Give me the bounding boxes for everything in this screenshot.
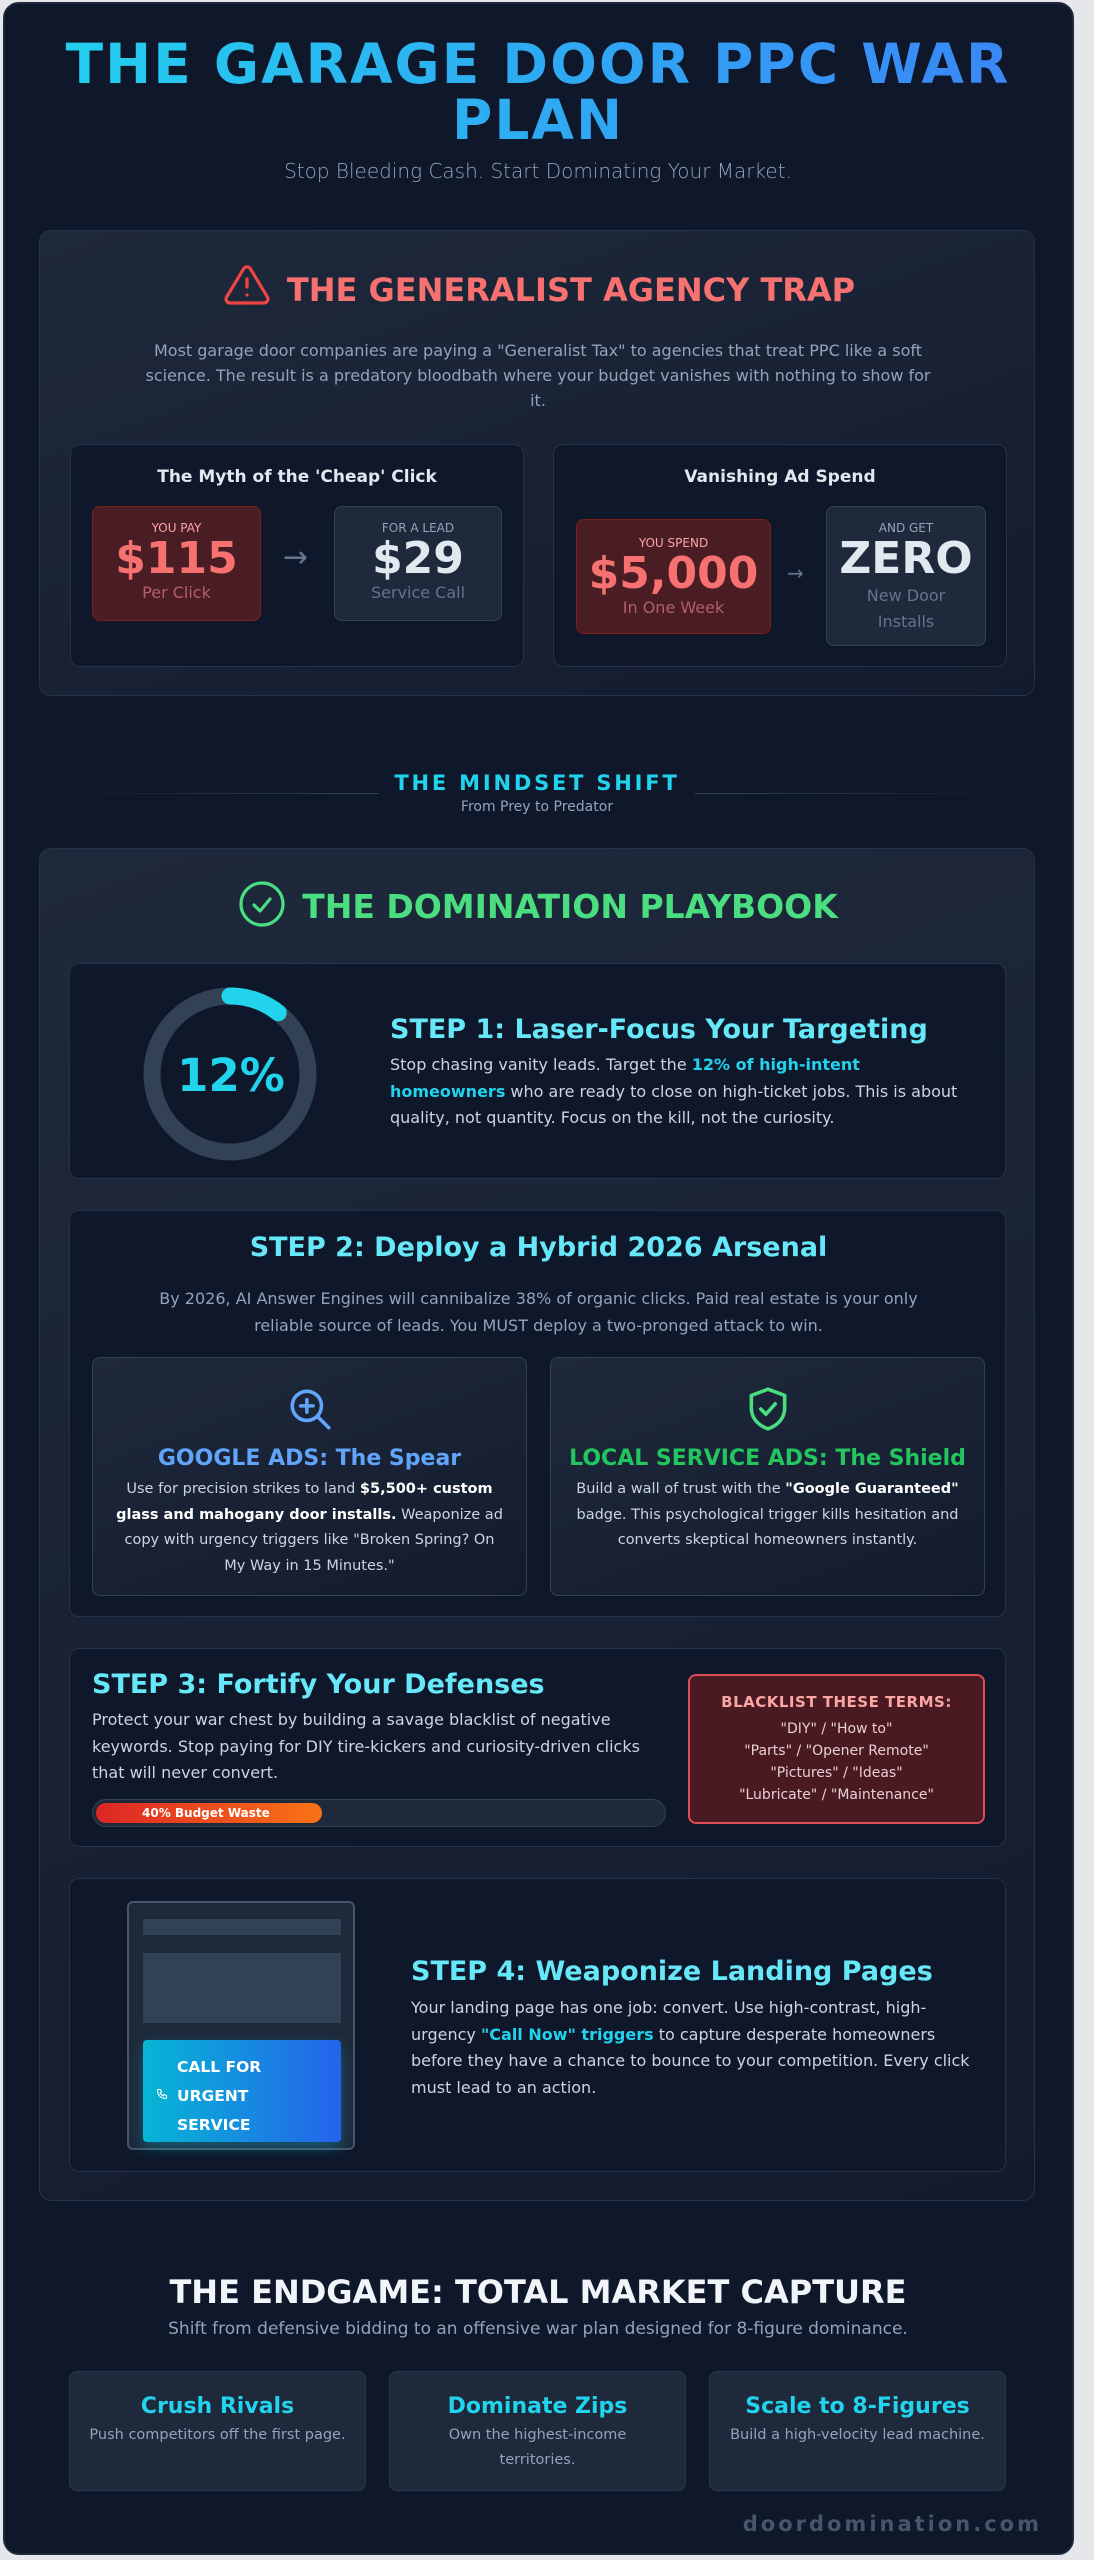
card: local service ads — [550, 1357, 985, 1596]
arrow: → — [787, 561, 804, 585]
card: crush rivals: Push competitors off the first page. — [89, 2427, 346, 2443]
stat: zero: Installs — [878, 612, 934, 631]
subheading: The Myth of the 'Cheap' Click — [157, 467, 437, 487]
cta button — [143, 2040, 341, 2142]
stat: $5,000: YOU SPEND — [639, 536, 708, 550]
heading: mindset shift: THE MINDSET SHIFT — [394, 771, 680, 795]
stat: $5,000: In One Week — [623, 598, 724, 617]
subheading: From Prey to Predator — [461, 799, 613, 815]
heading: playbook: THE DOMINATION PLAYBOOK — [302, 887, 838, 926]
subtitle: google ads: GOOGLE ADS: The Spear — [158, 1446, 461, 1471]
footer: domain: doordomination.com — [743, 2512, 1042, 2536]
step 2 title: STEP 2: Deploy a Hybrid 2026 Arsenal — [250, 1232, 827, 1263]
stat: $5,000: $5,000 — [589, 548, 758, 599]
panel: domination playbook — [39, 848, 1035, 2201]
step 4 title: STEP 4: Weaponize Landing Pages — [411, 1956, 933, 1987]
text: endgame subtitle: Shift from defensive bidding to an offensive war plan designed for 8-figure dominance. — [168, 2319, 908, 2339]
icon: warning — [224, 265, 270, 305]
stat: $5,000 — [576, 519, 771, 634]
blacklist box: BLACKLIST THESE TERMS: — [721, 1693, 952, 1711]
progress bar: 40% budget waste — [92, 1799, 666, 1827]
card: dominate zips — [389, 2371, 686, 2491]
step 2 text: By 2026, AI Answer Engines will cannibalize 38% of organic clicks. Paid real estate is your only reliable source of leads. You MUST deploy a two-pronged attack to win. — [159, 1289, 918, 1334]
step 1 title: STEP 1: Laser-Focus Your Targeting — [390, 1014, 928, 1045]
cta button: SERVICE — [177, 2116, 250, 2134]
icon: search plus — [290, 1390, 331, 1430]
panel: generalist agency trap — [39, 230, 1035, 696]
card: dominate zips: Dominate Zips — [448, 2394, 627, 2419]
blacklist box: "DIY" / "How to" — [781, 1721, 892, 1737]
stat: $115 — [92, 506, 261, 621]
card: google ads — [92, 1357, 527, 1596]
subpanel: vanishing spend — [553, 444, 1007, 667]
stat: zero: AND GET — [879, 521, 933, 535]
stat: $115: Per Click — [142, 583, 211, 602]
arrow: → — [283, 540, 308, 575]
blacklist box: "Lubricate" / "Maintenance" — [739, 1787, 934, 1803]
heading: endgame: THE ENDGAME: TOTAL MARKET CAPTURE — [169, 2273, 907, 2311]
card: scale — [709, 2371, 1006, 2491]
cta button: CALL FOR — [177, 2058, 261, 2076]
donut chart 12% — [144, 988, 316, 1160]
title: PLAN — [452, 88, 624, 152]
card: crush rivals: Crush Rivals — [141, 2394, 294, 2419]
subtitle: lsa: LOCAL SERVICE ADS: The Shield — [569, 1446, 966, 1471]
step 3 title: STEP 3: Fortify Your Defenses — [92, 1669, 545, 1700]
step 1 text: Stop chasing vanity leads. Target the 12% of high-intent homeowners who are ready to close on high-ticket jobs. This is about quality, not quantity. Focus on the kill, not the curiosity. — [390, 1055, 957, 1127]
donut chart 12%: 12% — [177, 1049, 285, 1102]
stat: $29: FOR A LEAD — [382, 521, 454, 535]
card: scale: Scale to 8-Figures — [745, 2394, 970, 2419]
stat: zero: ZERO — [839, 533, 973, 584]
cta button: URGENT — [177, 2087, 248, 2105]
text: Use for precision strikes to land $5,500+ custom glass and mahogany door installs. Weaponize ad copy with urgency triggers like "Broken Spring? On My Way in 15 Minutes." — [116, 1481, 503, 1574]
card: crush rivals — [69, 2371, 366, 2491]
heading: agency trap: THE GENERALIST AGENCY TRAP — [287, 271, 855, 309]
blacklist box — [688, 1674, 985, 1824]
step 4 text: Your landing page has one job: convert. Use high-contrast, high-urgency "Call Now" triggers to capture desperate homeowners before they have a chance to bounce to your competition. Every click must lead to an action. — [411, 1998, 970, 2096]
stat: $29: Service Call — [371, 583, 465, 602]
text: intro: Most garage door companies are paying a "Generalist Tax" to agencies that treat PPC like a soft science. The result is a predatory bloodbath where your budget vanishes with nothing to show for it. — [146, 341, 930, 410]
stat: $29: $29 — [372, 533, 464, 584]
stat: $29 — [334, 506, 502, 621]
subpanel: cheap click — [70, 444, 524, 667]
blacklist box: "Parts" / "Opener Remote" — [744, 1743, 929, 1759]
text: Build a wall of trust with the "Google Guaranteed" badge. This psychological trigger kills hesitation and converts skeptical homeowners instantly. — [576, 1481, 959, 1548]
subtitle: Stop Bleeding Cash. Start Dominating Your Market. — [284, 159, 792, 183]
blacklist box: "Pictures" / "Ideas" — [770, 1765, 903, 1781]
stat: $115: $115 — [115, 533, 238, 584]
title: THE GARAGE DOOR PPC WAR — [66, 32, 1010, 96]
progress bar: 40% budget waste: 40% Budget Waste — [142, 1806, 270, 1820]
step 4 card — [69, 1878, 1006, 2172]
step 2 card — [69, 1210, 1006, 1617]
card: scale: Build a high-velocity lead machine. — [730, 2427, 985, 2443]
subheading: Vanishing Ad Spend — [684, 467, 876, 487]
step 3 text: Protect your war chest by building a savage blacklist of negative keywords. Stop paying for DIY tire-kickers and curiosity-driven clicks that will never convert. — [92, 1710, 640, 1782]
card: dominate zips: Own the highest-income territories. — [449, 2427, 626, 2468]
divider: mindset shift — [112, 771, 962, 815]
stat: $115: YOU PAY — [152, 521, 201, 535]
icon: shield check — [750, 1387, 786, 1431]
step 1 card — [69, 963, 1006, 1179]
title — [0, 36, 1076, 148]
step 3 card — [69, 1648, 1006, 1847]
icon: check circle — [239, 881, 285, 927]
landing page mockup — [127, 1901, 355, 2150]
stat: zero: New Door — [867, 586, 945, 605]
stat: zero — [826, 506, 986, 646]
